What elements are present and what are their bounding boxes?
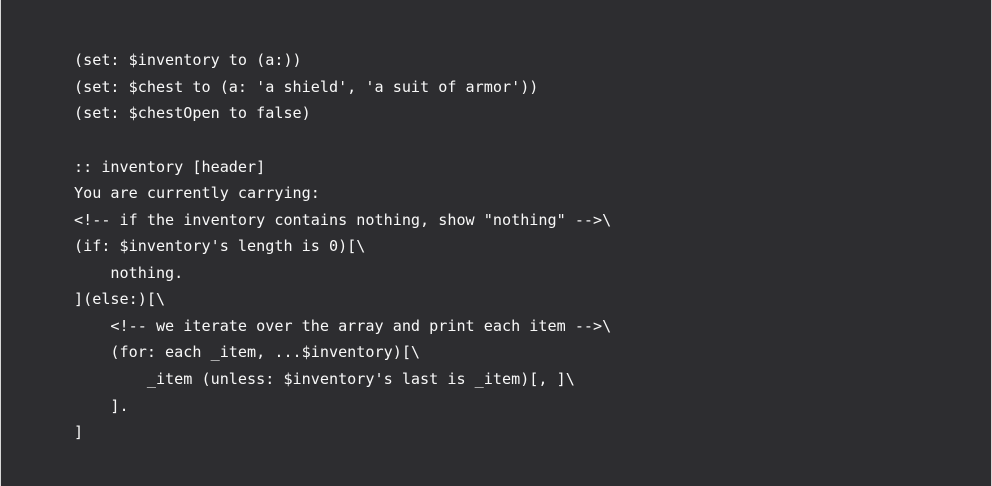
text block: code listing: (set: $inventory to (a:)) (set: $chest to (a: 'a shield', 'a suit of armor')) (set: $chestOpen to false) :: inventory [header] You are currently carrying: <!-- if the inventory contains nothing, show "nothing" -->\ (if: $inventory's length is 0)[\ nothing. ](else:)[\ <!-- we iterate over the array and print each item -->\ (for: each _item, ...$inventory)[\ _item (unless: $inventory's last is _item)[, ]\ ]. ]: [74, 51, 611, 441]
